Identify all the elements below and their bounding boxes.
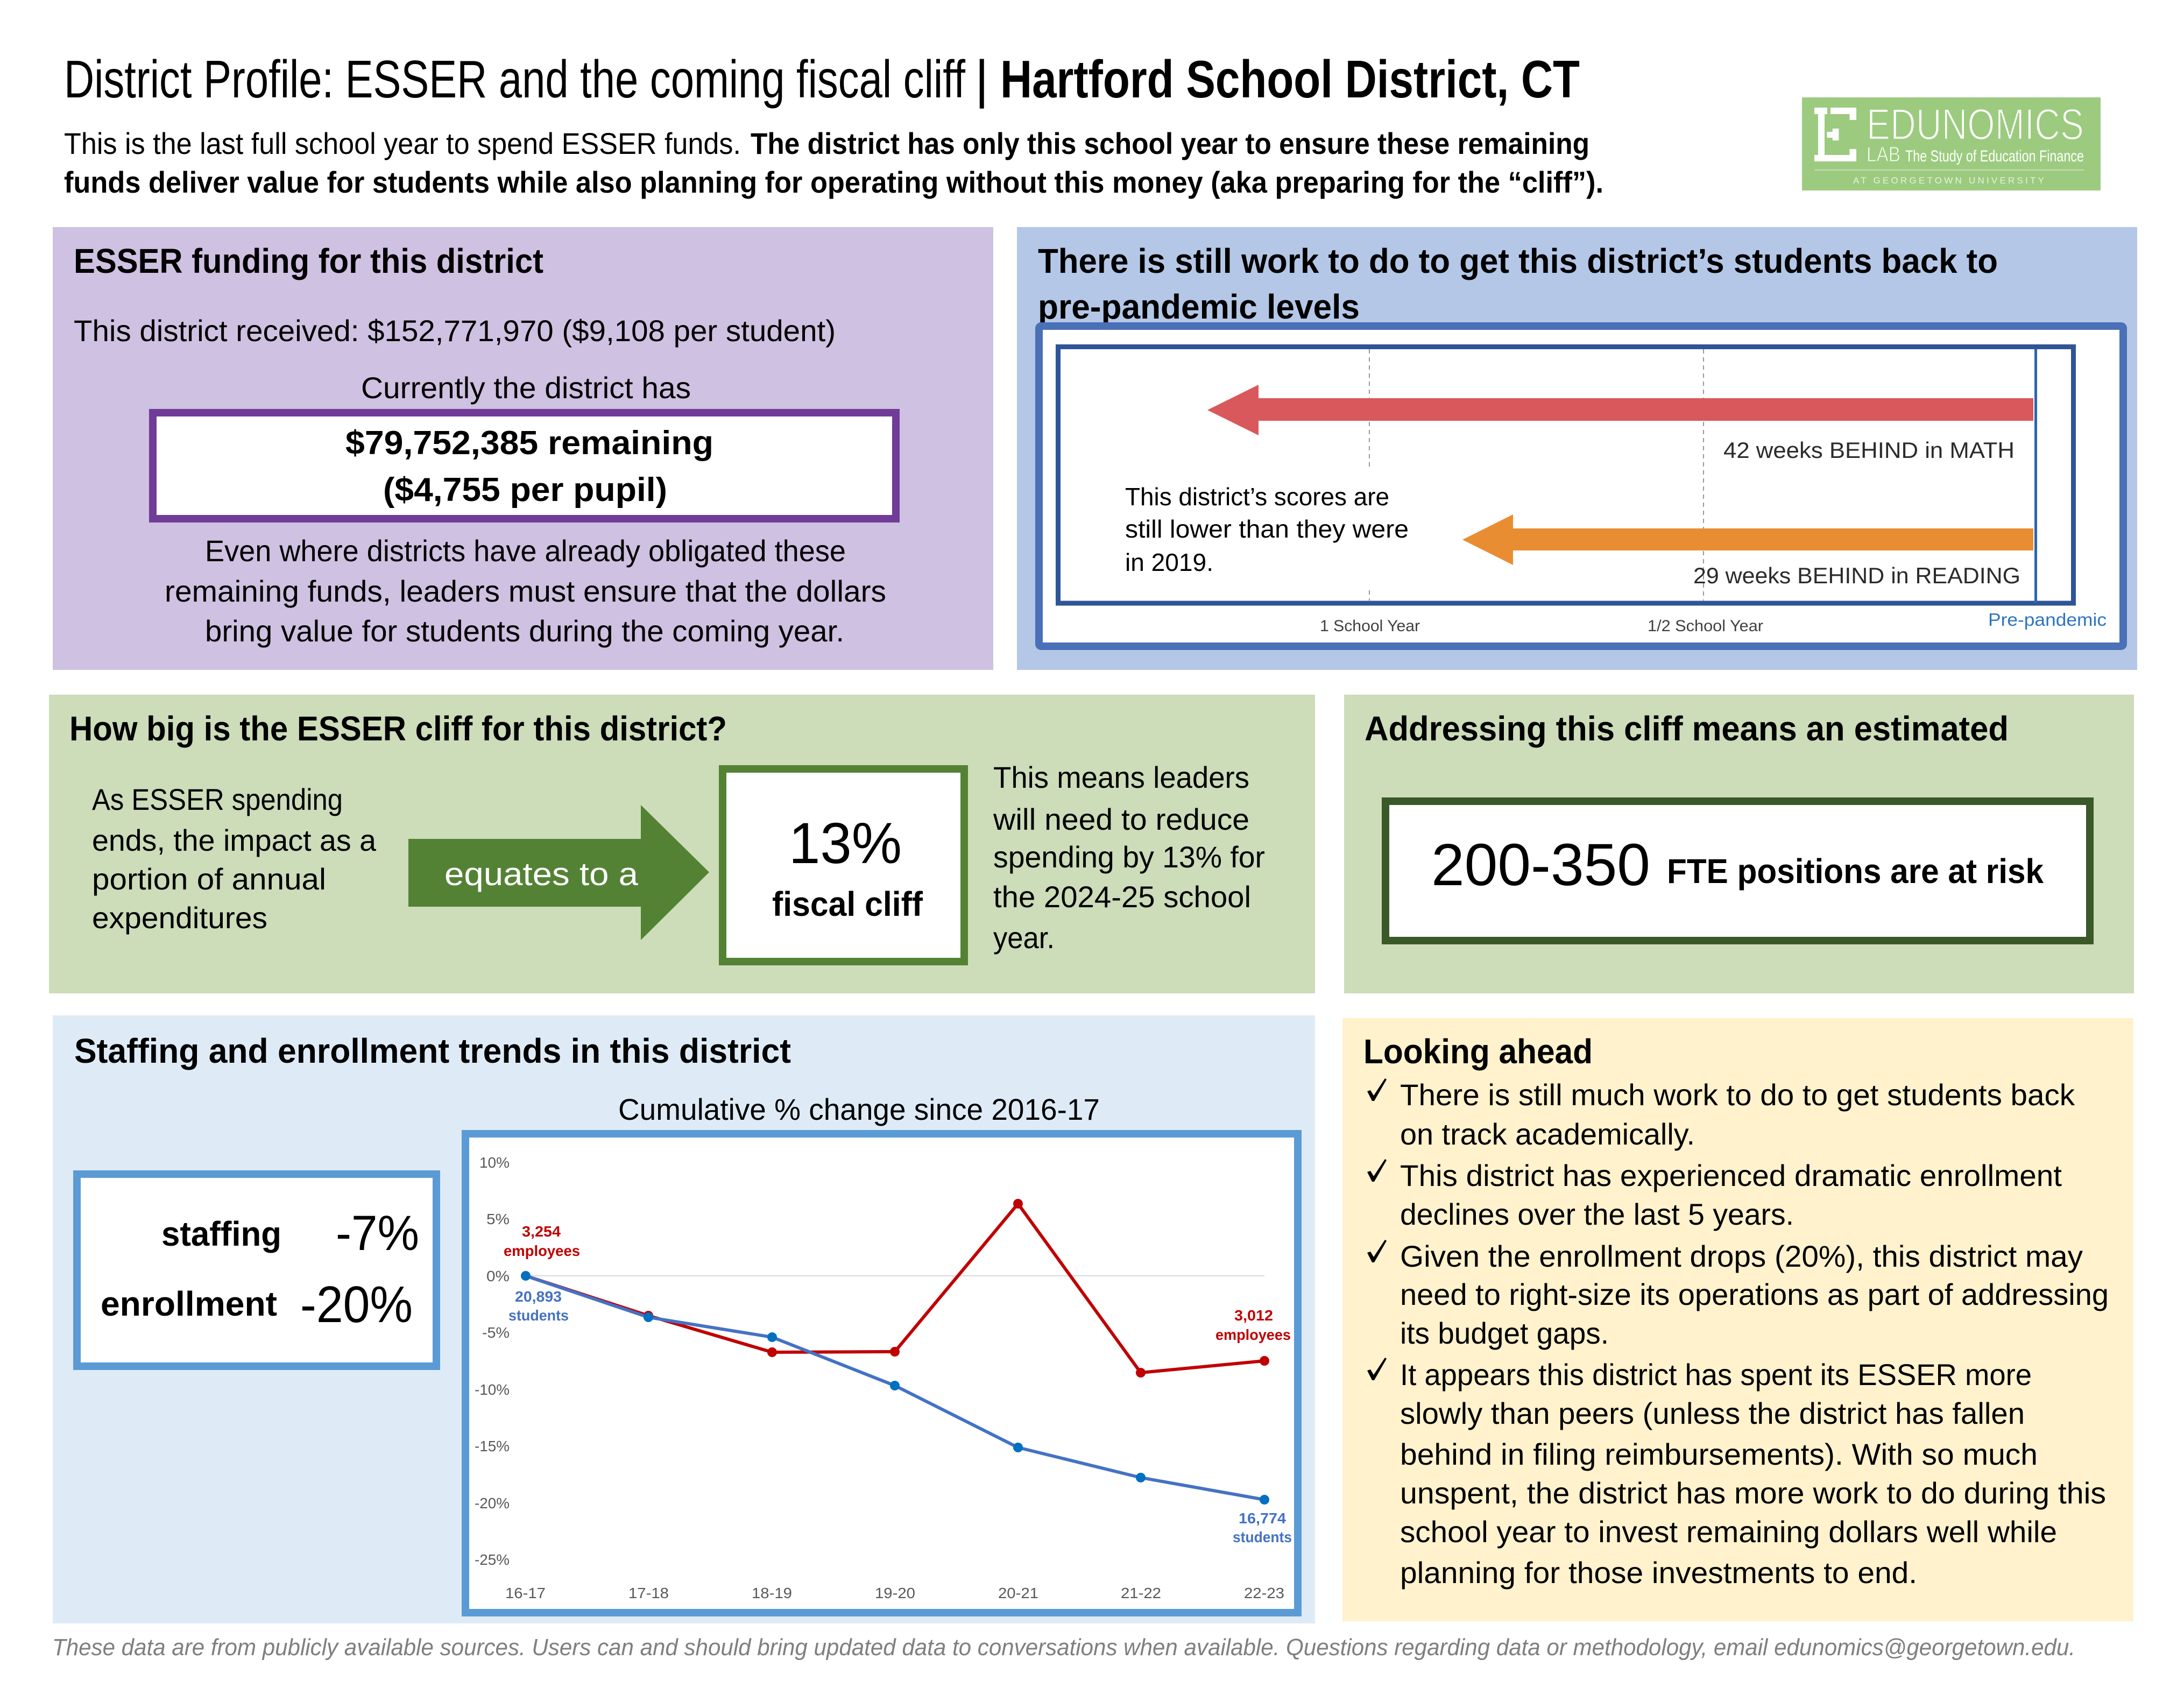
x axis labels — [505, 1585, 1284, 1601]
text: ESSER spending ends: expenditures — [92, 901, 267, 935]
title: District Profile: ESSER and the coming fiscal cliff — [64, 50, 966, 109]
text: obligated funds note: bring value for students during the coming year. — [205, 614, 844, 648]
arrow: math — [1207, 385, 2033, 435]
data labels: start students: 20,893 — [515, 1288, 562, 1305]
x axis labels: 22-23 — [1244, 1585, 1284, 1601]
text: ESSER spending ends: portion of annual — [92, 862, 326, 896]
x axis labels: 21-22 — [1121, 1585, 1161, 1601]
checklist item 3 — [1367, 1239, 2109, 1350]
panel: looking ahead — [1342, 1018, 2133, 1621]
data labels: end students — [1233, 1510, 1292, 1545]
axis labels: 1 School Year — [1320, 617, 1420, 635]
y axis labels: -15% — [475, 1438, 510, 1454]
text: leaders must reduce: spending by 13% for — [993, 840, 1265, 874]
callout: FTE positions — [1386, 801, 2090, 941]
logo: Edunomics Lab: EDUNOMICS — [1867, 100, 2084, 149]
checklist item 4: behind in filing reimbursements). With so much — [1400, 1437, 2038, 1471]
text: leaders must reduce: the 2024-25 school — [993, 880, 1251, 914]
checklist item 4: planning for those investments to end. — [1400, 1556, 1917, 1590]
heading: pre-pandemic levels: There is still work to do to get this district’s students back to — [1038, 242, 1998, 280]
text: ESSER spending ends: ends, the impact as a — [92, 823, 377, 857]
checklist item 2: declines over the last 5 years. — [1400, 1197, 1794, 1231]
text: leaders must reduce: will need to reduce — [993, 802, 1249, 836]
checklist item 3: need to right-size its operations as part of addressing — [1400, 1277, 2109, 1311]
y axis labels — [475, 1154, 510, 1568]
callout: remaining funds: $79,752,385 remaining — [345, 425, 713, 462]
series: employees — [521, 1199, 1269, 1378]
checklist item 2: This district has experienced dramatic enrollment — [1400, 1159, 2062, 1192]
data labels: start employees — [504, 1223, 580, 1259]
heading: positions at risk: Addressing this cliff means an estimated — [1365, 709, 2009, 748]
checklist item 1 — [1367, 1078, 2075, 1151]
footer note: These data are from publicly available sources. Users can and should bring updated data to conversations when available. Questions regarding data or methodology, email edunomics@georgetown.edu. — [52, 1634, 2075, 1661]
y axis labels: -10% — [475, 1381, 510, 1398]
callout: 13% fiscal cliff — [723, 769, 964, 962]
x axis labels: 18-19 — [752, 1585, 792, 1601]
checklist item 4 — [1367, 1358, 2106, 1590]
y axis labels: -5% — [482, 1324, 510, 1341]
callout: remaining funds — [153, 413, 896, 519]
x axis labels: 16-17 — [505, 1585, 546, 1601]
intro text: This is the last full school year to spend ESSER funds. — [64, 126, 741, 160]
callout: staffing and enrollment change: staffing — [161, 1214, 281, 1253]
text: obligated funds note: Even where districts have already obligated these — [205, 534, 846, 568]
y axis labels: 10% — [479, 1154, 510, 1171]
data labels: end employees: 3,012 — [1234, 1307, 1273, 1324]
heading: staffing and enrollment: Staffing and enrollment trends in this district — [74, 1032, 791, 1070]
data labels: end employees: employees — [1215, 1326, 1291, 1343]
y axis labels: 0% — [486, 1268, 510, 1284]
chart: weeks behind — [1039, 326, 2123, 646]
callout: 13% fiscal cliff: 13% — [789, 810, 902, 875]
y axis labels: 5% — [486, 1211, 510, 1227]
checklist item 4: slowly than peers (unless the district has fallen — [1400, 1396, 2025, 1430]
callout: FTE positions: FTE positions are at risk — [1667, 852, 2044, 891]
text: amount received: This district received: $152,771,970 ($9,108 per student) — [74, 314, 836, 348]
data labels: end employees — [1215, 1307, 1291, 1343]
arrow: reading — [1462, 514, 2033, 565]
checklist item 1: There is still much work to do to get students back — [1400, 1078, 2075, 1112]
intro text: The district has only this school year to ensure these remaining — [751, 126, 1589, 160]
logo: Edunomics Lab — [1802, 97, 2101, 190]
text: scores note: still lower than they were — [1125, 515, 1409, 543]
data labels: end students: 16,774 — [1239, 1510, 1286, 1527]
checklist item 1: on track academically. — [1400, 1117, 1695, 1151]
checklist item 2 — [1367, 1159, 2062, 1231]
title: | — [975, 50, 988, 109]
heading: pre-pandemic levels — [1038, 242, 1998, 326]
checklist item 4: unspent, the district has more work to do during this — [1400, 1476, 2106, 1510]
x axis labels: 19-20 — [875, 1585, 915, 1601]
axis labels: 1/2 School Year — [1648, 617, 1763, 635]
data labels: start students — [508, 1288, 569, 1324]
panel: staffing and enrollment — [53, 1015, 1315, 1623]
callout: staffing and enrollment change — [77, 1174, 436, 1366]
intro text — [64, 126, 1603, 199]
heading: looking ahead: Looking ahead — [1363, 1032, 1593, 1071]
text: leaders must reduce: This means leaders — [993, 760, 1249, 794]
heading: pre-pandemic levels: pre-pandemic levels — [1038, 287, 1360, 326]
text: leaders must reduce — [993, 760, 1265, 955]
line chart — [465, 1134, 1298, 1613]
text: scores note — [1125, 483, 1409, 576]
text: obligated funds note — [165, 534, 886, 648]
heading: ESSER funding: ESSER funding for this district — [74, 242, 543, 280]
intro text: funds deliver value for students while also planning for operating without this money (aka preparing for the “cliff”). — [64, 165, 1603, 199]
label: reading weeks: 29 weeks BEHIND in READING — [1693, 563, 2020, 588]
panel: positions at risk — [1344, 695, 2134, 993]
arrow: equates to a — [408, 805, 709, 940]
checklist item 4: school year to invest remaining dollars well while — [1400, 1515, 2057, 1549]
text: obligated funds note: remaining funds, leaders must ensure that the dollars — [165, 574, 886, 608]
panel: pre-pandemic levels — [1017, 227, 2137, 670]
logo: Edunomics Lab: LAB — [1867, 143, 1900, 166]
checklist item 4: It appears this district has spent its ESSER more — [1400, 1358, 2032, 1392]
text: leaders must reduce: year. — [993, 921, 1055, 955]
callout: staffing and enrollment change: -20% — [300, 1276, 413, 1333]
axis labels — [1320, 610, 2107, 635]
callout: 13% fiscal cliff: fiscal cliff — [772, 885, 923, 923]
data labels: start students: students — [508, 1307, 569, 1324]
panel: cliff size — [49, 695, 1315, 993]
y axis labels: -20% — [475, 1495, 510, 1512]
logo: Edunomics Lab: The Study of Education Finance — [1905, 147, 2084, 165]
label: math weeks: 42 weeks BEHIND in MATH — [1723, 437, 2015, 463]
chart title: Cumulative % change since 2016-17 — [618, 1092, 1100, 1126]
x axis labels: 17-18 — [628, 1585, 669, 1601]
text: scores note: This district’s scores are — [1125, 483, 1389, 511]
checklist item 3: Given the enrollment drops (20%), this district may — [1400, 1239, 2083, 1273]
logo: Edunomics Lab: AT GEORGETOWN UNIVERSITY — [1853, 175, 2044, 186]
arrow: equates to a: equates to a — [444, 856, 639, 892]
data labels: start employees: employees — [504, 1242, 580, 1259]
y axis labels: -25% — [475, 1551, 510, 1568]
x axis labels: 20-21 — [998, 1585, 1038, 1601]
text: scores note: in 2019. — [1125, 548, 1213, 576]
axis labels: Pre-pandemic — [1988, 610, 2107, 630]
data labels: end students: students — [1233, 1529, 1292, 1545]
callout: remaining funds: ($4,755 per pupil) — [383, 471, 667, 508]
checklist item 3: its budget gaps. — [1400, 1316, 1609, 1350]
text: ESSER spending ends: As ESSER spending — [92, 782, 343, 816]
callout: FTE positions: 200-350 — [1431, 832, 1650, 898]
callout: staffing and enrollment change: -7% — [336, 1206, 419, 1261]
title: Hartford School District, CT — [1000, 50, 1580, 109]
series: students — [521, 1271, 1269, 1505]
callout: staffing and enrollment change: enrollment — [101, 1284, 277, 1323]
data labels: start employees: 3,254 — [522, 1223, 561, 1240]
text: ESSER spending ends — [92, 782, 377, 935]
text: currently has: Currently the district has — [361, 371, 691, 405]
heading: cliff size: How big is the ESSER cliff for this district? — [69, 709, 727, 748]
icon: Edunomics E mark — [1814, 108, 1856, 161]
panel: ESSER funding — [53, 227, 993, 670]
